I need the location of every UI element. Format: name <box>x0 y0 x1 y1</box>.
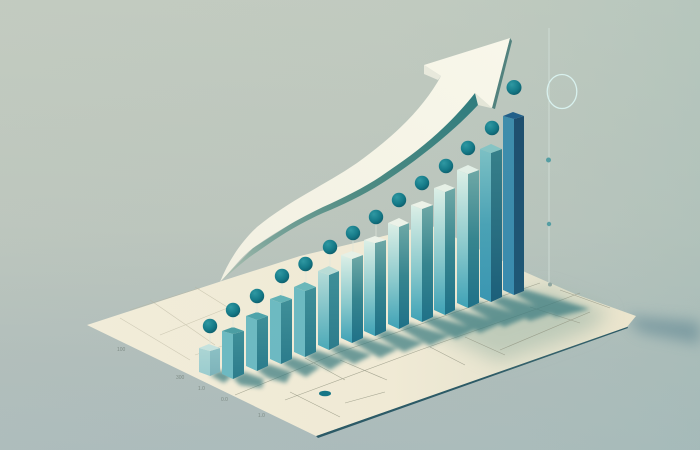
bar 12 <box>457 165 479 308</box>
arrow: rising curve <box>220 38 512 282</box>
axis labels: 100 <box>117 347 126 353</box>
bar 3 <box>246 312 268 371</box>
arrow head side <box>491 38 512 109</box>
chart: fourteen rising bars <box>199 112 524 379</box>
bar 4 <box>270 295 292 364</box>
bar shadows <box>210 289 590 388</box>
shadow: paper edge cast to the right <box>625 316 700 344</box>
bar 11 <box>434 184 455 315</box>
panel: paper grid sheet <box>87 225 636 438</box>
bar 2 <box>222 327 244 379</box>
axis labels: 300 <box>176 375 185 381</box>
axis labels: 1.0 <box>258 413 265 419</box>
bar 10 <box>411 201 433 322</box>
bar 9 <box>388 218 409 329</box>
axis labels <box>117 347 265 419</box>
bar 6 <box>318 266 339 350</box>
bar 13 <box>480 144 502 302</box>
bar 5 <box>294 282 316 357</box>
indicator: vertical line with ring and nodes <box>546 28 577 286</box>
bar 1 <box>199 344 220 376</box>
arrow top face <box>220 38 510 282</box>
bar 7 <box>341 251 363 343</box>
grid lines on paper <box>120 287 240 360</box>
ring <box>547 74 577 108</box>
bar 8 <box>364 236 386 336</box>
axis labels: 0.0 <box>221 397 228 403</box>
bar 14 <box>503 112 524 295</box>
data point dots <box>203 80 522 333</box>
axis labels: 1.0 <box>198 386 205 392</box>
data point stems <box>210 224 376 345</box>
arrow side face <box>220 93 478 282</box>
marker: paper dot <box>319 391 331 396</box>
paper shading <box>430 288 610 362</box>
